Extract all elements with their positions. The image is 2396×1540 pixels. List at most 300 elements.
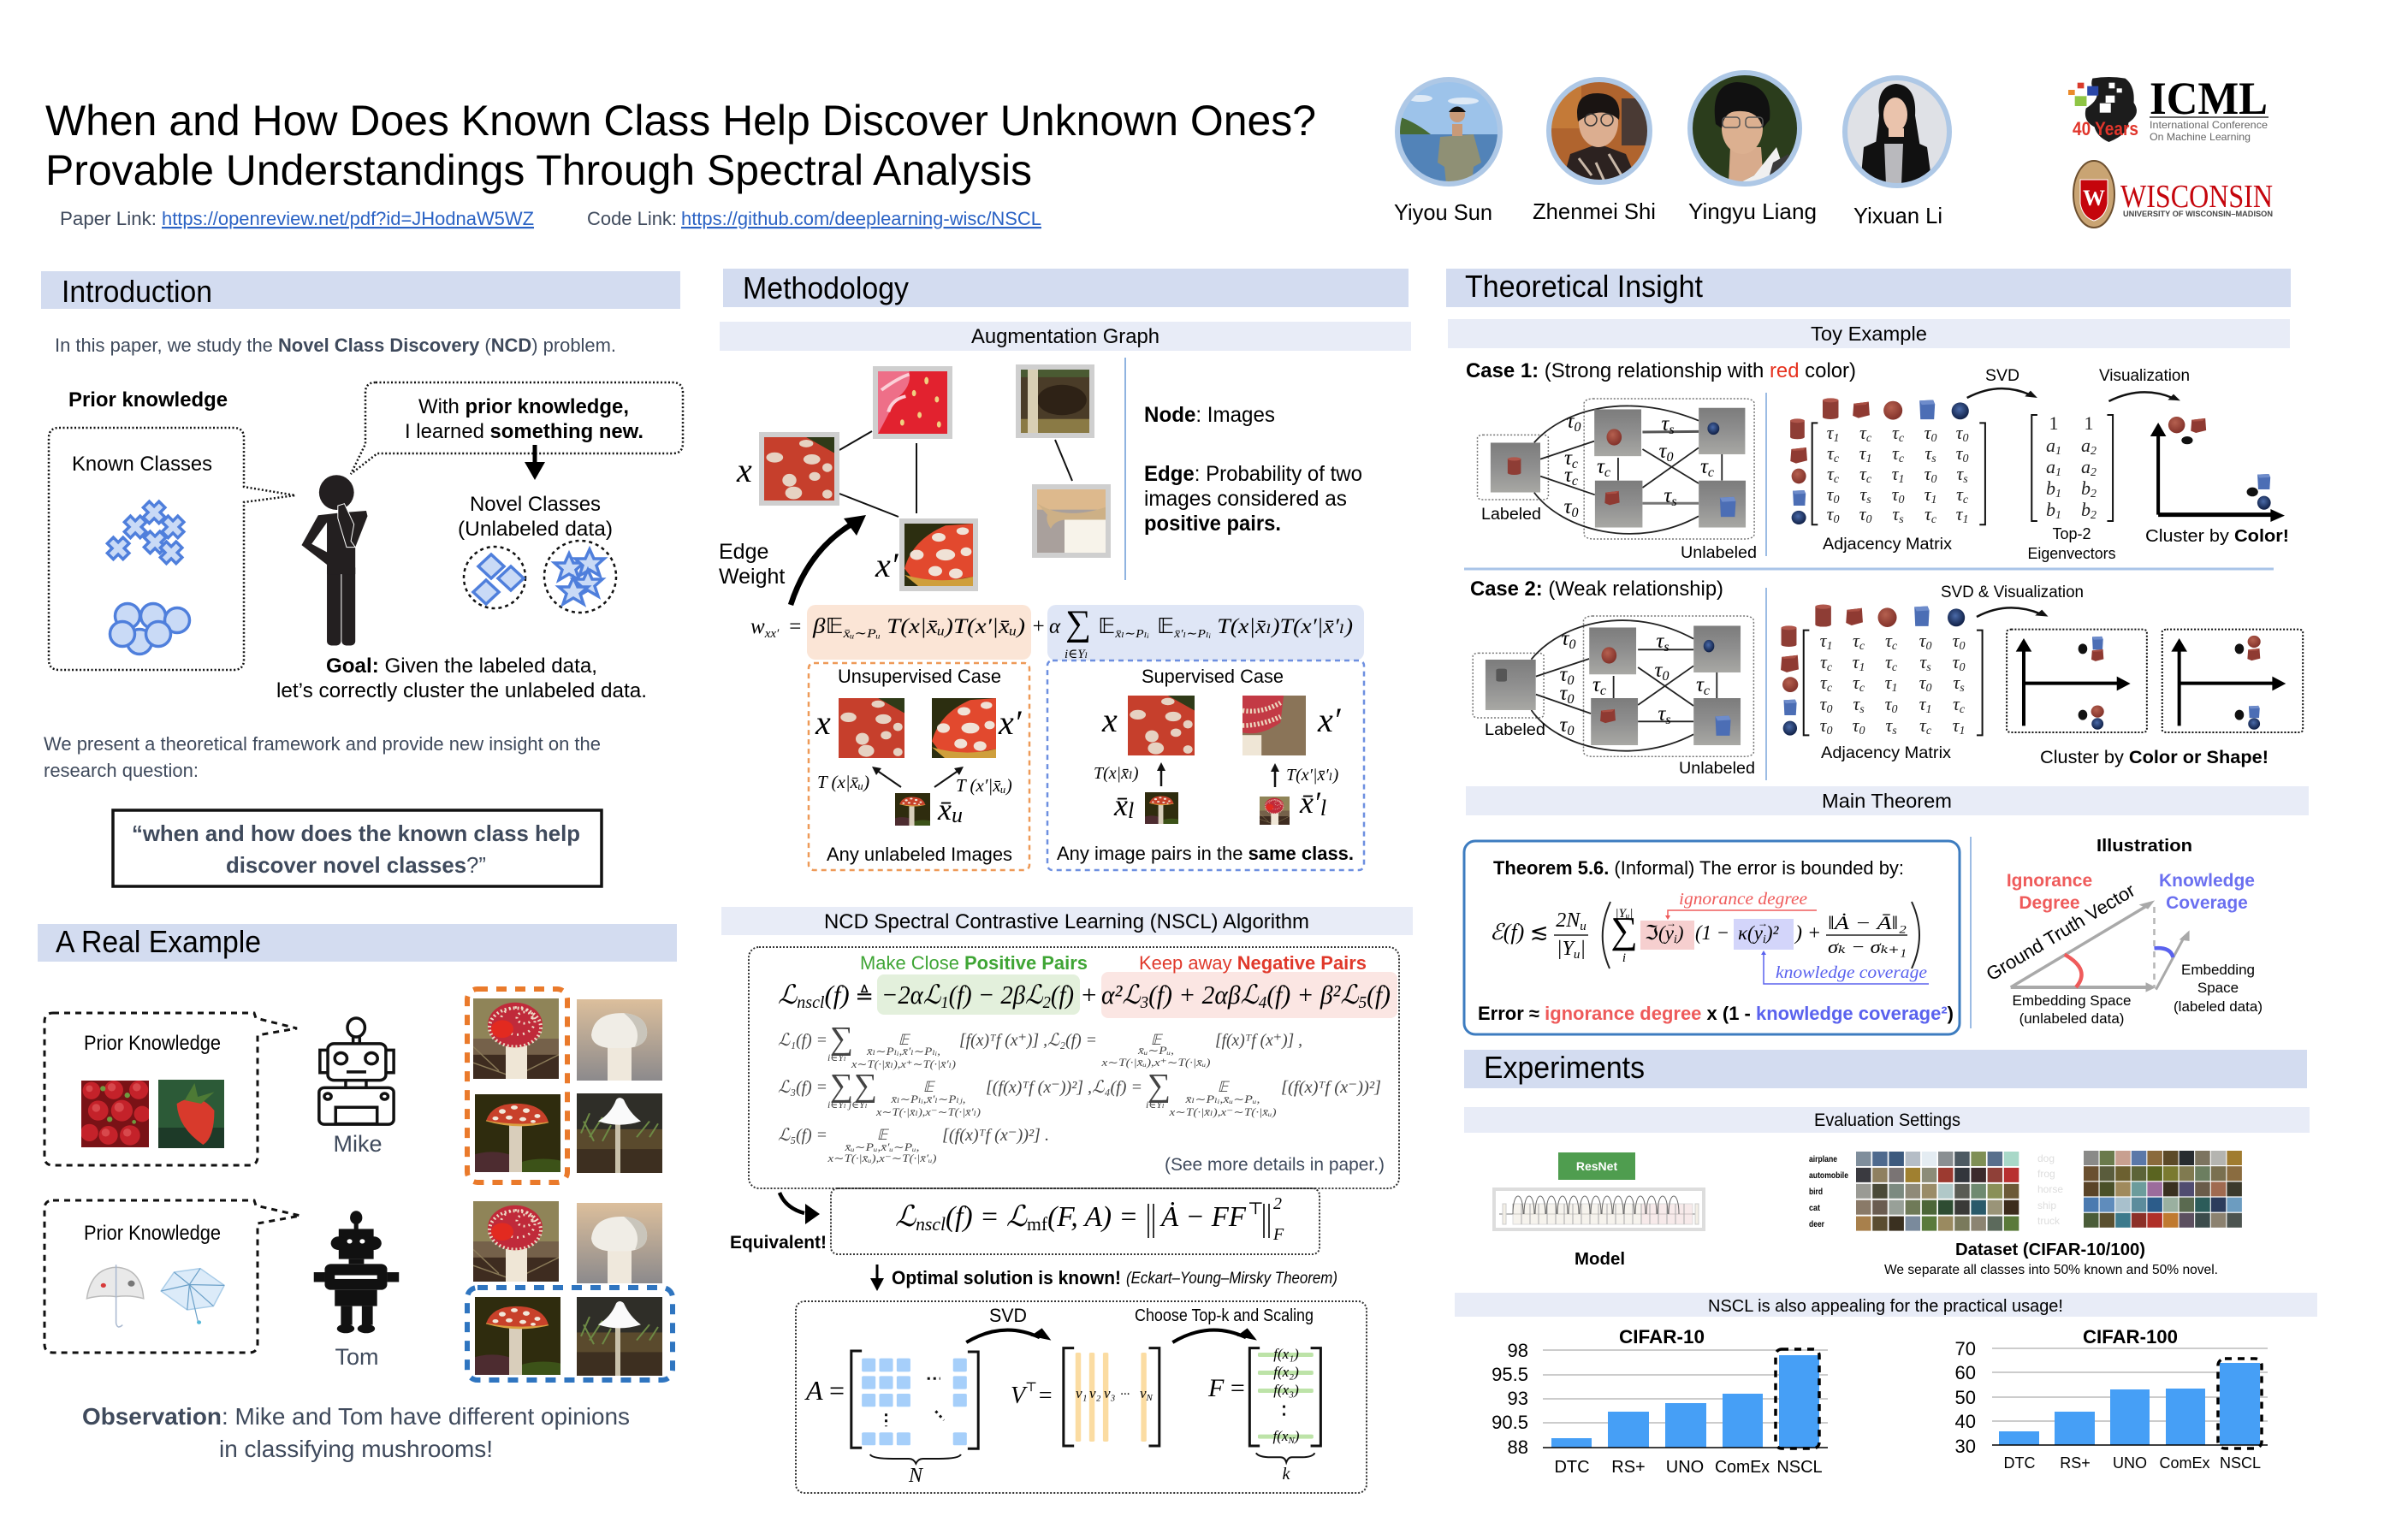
bar chart: CIFAR-10: NSCL	[1776, 1458, 1823, 1477]
matrix: case 1 adjacency: c	[1899, 432, 1905, 445]
equation: edge weight: 𝔼	[1149, 613, 1174, 638]
panel: unsupervised case: x̄	[938, 792, 952, 826]
matrix: case 2 adjacency: τ	[1885, 672, 1891, 693]
equation: error bound: i	[1674, 933, 1677, 946]
matrix: case 1 adjacency: 0	[1962, 432, 1968, 445]
equation: NSCL loss: +	[1080, 980, 1098, 1010]
matrix: case 1 adjacency: s	[1866, 494, 1871, 506]
matrix: case 2 adjacency: τ	[1820, 714, 1826, 736]
text: observation: in classifying mushrooms!	[219, 1436, 493, 1462]
callout: speech bubble	[351, 382, 683, 474]
matrix F: F =	[1207, 1374, 1245, 1402]
label: edge weight with arrow: Weight	[719, 565, 785, 589]
heading: Theoretical Insight: Theoretical Insight	[1465, 269, 1703, 304]
matrix: case 2 adjacency: 1	[1891, 682, 1897, 695]
matrix: case 1 adjacency: c	[1834, 473, 1840, 486]
author: Yiyou Sun: Yiyou Sun	[1394, 199, 1492, 225]
matrix: case 2 adjacency: c	[1960, 703, 1966, 716]
equation: error bound: i	[1622, 951, 1626, 965]
image grid: CIFAR novel classes: horse	[2037, 1183, 2063, 1195]
equations: L1 to L5: x̄ᵤ∼Pᵤ,	[1137, 1045, 1174, 1057]
matrix: case 1 adjacency: τ	[1827, 483, 1833, 505]
diagram: case 1 graph: c	[1708, 465, 1714, 480]
equation: matrix factorization: F	[1272, 1225, 1284, 1244]
arrow: equivalent: Equivalent!	[730, 1233, 827, 1253]
equation: error bound: |Y	[1557, 938, 1574, 960]
matrix F: f(x₃)	[1273, 1382, 1299, 1398]
matrix: case 1 adjacency: 1	[1898, 473, 1904, 486]
logo: ICML	[2068, 73, 2268, 143]
panel: unsupervised case: u	[952, 803, 963, 827]
matrix: case 2 adjacency: 1	[1925, 703, 1931, 716]
diagram: case 1 graph: c	[1572, 474, 1578, 489]
equation: error bound	[1490, 890, 1927, 982]
diagram: case 2 graph: 0	[1567, 673, 1574, 688]
diagram: case 2 graph: τ	[1562, 627, 1569, 650]
matrix: case 1 adjacency: 0	[1833, 494, 1839, 506]
image grid: CIFAR known classes	[1809, 1152, 2019, 1231]
panel: methodology	[719, 269, 1413, 1493]
equations: L1 to L5: ℒ₅(f) =	[778, 1126, 827, 1145]
diagram: ResNet model: Model	[1575, 1250, 1625, 1269]
callout: speech bubble: I learned something new.	[405, 420, 643, 443]
equation: error bound: ignorance degree	[1679, 890, 1807, 909]
bar chart: CIFAR-100: 40	[1955, 1411, 1976, 1432]
icon: thinking person	[301, 475, 367, 645]
diagram: case 1 graph: Labeled	[1481, 506, 1541, 524]
equation: error bound: ) +	[1794, 922, 1821, 945]
panel: SVD solution: Choose Top-k and Scaling	[1135, 1306, 1314, 1325]
matrix: case 1 adjacency: 0	[1962, 453, 1968, 465]
matrix: case 2 adjacency: τ	[1853, 693, 1859, 714]
diagram: case 1 graph	[1478, 399, 1757, 562]
diagram: case 2 graph: τ	[1656, 630, 1664, 653]
equations: L1 to L5: x∼T(·|x̄ₗ),x⁻∼T(·|x̄ᵤ)	[1168, 1106, 1277, 1118]
text: novel classes	[458, 493, 613, 541]
matrix: case 1 adjacency: τ	[1956, 483, 1963, 505]
callout: Tom prior knowledge	[44, 1200, 300, 1353]
matrix: top-2 eigenvectors: 2	[2091, 466, 2096, 479]
equation: NSCL loss: −2αℒ	[881, 980, 946, 1010]
matrix: case 2 adjacency: 0	[1826, 703, 1832, 716]
bar chart: CIFAR-10: ComEx	[1715, 1458, 1770, 1477]
equation: NSCL loss: ℒ	[778, 980, 797, 1010]
diagram: case 2 graph: τ	[1696, 673, 1704, 696]
matrix: case 1 adjacency: s	[1899, 513, 1904, 526]
icon: robot Tom	[314, 1211, 399, 1370]
equation: NSCL loss: (f) + 2αβℒ	[1148, 980, 1259, 1010]
label: prior knowledge: Prior knowledge	[68, 388, 228, 412]
image grid: CIFAR novel classes: frog	[2037, 1168, 2055, 1180]
matrix: case 1 adjacency: τ	[1827, 463, 1834, 484]
logo: ICML: On Machine Learning	[2150, 131, 2251, 143]
logo: ICML: International Conference	[2150, 119, 2268, 131]
diagram: illustration: Knowledge	[2159, 871, 2255, 891]
arrows: SVD and Visualization: Visualization	[2099, 367, 2190, 385]
equations: L1 to L5: x̄ₗ∼Pₗᵢ,x̄ᵤ∼Pᵤ,	[1184, 1093, 1260, 1105]
callout: research question: “when and how does the known class help	[132, 820, 580, 846]
matrix: case 2 adjacency: τ	[1919, 693, 1925, 714]
equation: NSCL loss: 5	[1359, 993, 1367, 1012]
heading: Introduction	[41, 271, 680, 309]
matrix: case 2 adjacency: τ	[1885, 630, 1892, 651]
matrix: case 2 adjacency: c	[1827, 682, 1833, 695]
matrix: case 2 adjacency: τ	[1919, 714, 1926, 736]
panel: SVD solution	[796, 1301, 1367, 1493]
equation: NSCL loss: (f) − 2βℒ	[949, 980, 1043, 1010]
matrix: case 1 adjacency: τ	[1859, 463, 1866, 484]
matrix: case 2 adjacency: 1	[1826, 640, 1832, 653]
equation: matrix factorization	[831, 1188, 1320, 1254]
matrix V transpose: ⊤	[1025, 1381, 1037, 1395]
bar chart: CIFAR-100: ComEx	[2160, 1454, 2209, 1472]
matrix: case 1 adjacency: c	[1963, 494, 1969, 506]
bar chart: CIFAR-10: 98	[1508, 1340, 1528, 1361]
subheading: Main Theorem: Main Theorem	[1822, 790, 1952, 812]
matrix: case 1 adjacency: c	[1866, 432, 1872, 445]
matrix: case 2 adjacency: c	[1859, 682, 1865, 695]
title: Provable Understandings Through Spectral Analysis	[45, 146, 1032, 194]
heading: Methodology: Methodology	[743, 270, 909, 305]
equation: edge weight: w	[750, 615, 765, 638]
author: Yingyu Liang: Yingyu Liang	[1688, 198, 1817, 224]
matrix: top-2 eigenvectors: 2	[2091, 445, 2096, 458]
matrix: top-2 eigenvectors: Top-2	[2052, 525, 2091, 542]
arrows: SVD and Visualization: SVD	[1985, 367, 2019, 385]
diagram: case 1 graph: 0	[1571, 506, 1578, 520]
panel: supervised case	[1047, 660, 1364, 870]
matrix: case 2 adjacency: 0	[1859, 725, 1865, 737]
matrix: case 1 adjacency: 0	[1865, 513, 1871, 526]
panel: supervised case: Any image pairs in the same class.	[1057, 843, 1354, 864]
matrix: case 2 adjacency: s	[1926, 661, 1931, 674]
matrix: case 2 adjacency: s	[1960, 682, 1965, 695]
panel: unsupervised case: Unsupervised Case	[838, 666, 1001, 687]
matrix: top-2 eigenvectors: 1	[2055, 509, 2061, 522]
diagram: case 2 graph: 0	[1662, 669, 1669, 684]
diagram: case 1 graph: τ	[1597, 455, 1604, 478]
divider line	[1124, 358, 1126, 580]
logo: ICML: ICML	[2150, 73, 2268, 124]
diagram: ResNet model	[1494, 1152, 1704, 1269]
callout: known classes: Known Classes	[72, 453, 212, 476]
matrix: case 2 adjacency: τ	[1885, 693, 1891, 714]
matrix: case 2 adjacency: 0	[1959, 640, 1965, 653]
matrix: top-2 eigenvectors: a	[2046, 456, 2055, 477]
paper and code links	[60, 208, 1041, 229]
diagram: illustration: Coverage	[2166, 893, 2248, 913]
matrix: top-2 eigenvectors: b	[2046, 477, 2055, 499]
equation: edge weight: x̄ᵤ∼Pᵤ	[843, 627, 881, 641]
equations: L1 to L5: [f(x)ᵀf (x⁺)] ,	[1215, 1031, 1302, 1050]
equation: error bound: )²	[1764, 922, 1779, 944]
matrix: case 2 adjacency: 1	[1859, 661, 1865, 674]
bar chart: CIFAR-10: CIFAR-10	[1619, 1326, 1705, 1348]
icon: unlabeled diamonds and stars	[464, 541, 616, 613]
equations: L1 to L5: i∈Yₗ j∈Yₗ	[827, 1099, 868, 1111]
panel: introduction	[41, 271, 683, 886]
equation: NSCL loss: 4	[1259, 993, 1266, 1012]
panel: supervised case: T(x|x̄ₗ)	[1094, 764, 1139, 783]
matrix: case 1 adjacency: τ	[1925, 422, 1930, 443]
panel: unsupervised case: T (x′|x̄ᵤ)	[956, 775, 1012, 796]
equation: edge weight: =	[789, 615, 801, 638]
matrix: case 2 adjacency: τ	[1953, 672, 1960, 693]
panel: supervised case: x′	[1317, 701, 1342, 739]
equation: NSCL loss: 2	[1043, 993, 1051, 1012]
charts: cluster by color or shape: Cluster by Color or Shape!	[2040, 748, 2268, 767]
equation: matrix factorization: ⊤	[1248, 1199, 1264, 1218]
diagram: illustration: Ground Truth Vector	[1983, 880, 2138, 985]
matrix F: f(x	[1273, 1428, 1288, 1444]
diagram: case 2 graph: τ	[1655, 659, 1662, 682]
panel: unsupervised case: T (x|x̄ᵤ)	[817, 772, 869, 792]
matrix: case 2 adjacency: s	[1859, 703, 1865, 716]
matrix: case 1 adjacency: c	[1866, 473, 1872, 486]
matrix F: f(x₁)	[1273, 1346, 1299, 1362]
diagram: case 2 graph: Unlabeled	[1679, 760, 1755, 778]
matrix: top-2 eigenvectors: a	[2081, 435, 2091, 456]
matrix F: k	[1283, 1465, 1291, 1484]
matrix: case 2 adjacency: τ	[1853, 672, 1859, 693]
equations: L1 to L5: 𝔼	[877, 1127, 890, 1143]
matrix: top-2 eigenvectors: 2	[2091, 509, 2096, 522]
diagram: case 2 graph: Labeled	[1485, 721, 1545, 739]
text: framework: We present a theoretical framework and provide new insight on the	[44, 733, 601, 755]
callout: known classes	[49, 428, 295, 670]
logo: Wisconsin: UNIVERSITY OF WISCONSIN–MADISON	[2123, 210, 2273, 218]
equation: NSCL loss: ≜	[850, 984, 874, 1009]
equation: error bound: ℑ(y	[1645, 922, 1674, 945]
callout: Tom prior knowledge: Prior Knowledge	[84, 1222, 221, 1245]
matrix V transpose: v	[1140, 1385, 1147, 1401]
matrix V transpose: =	[1037, 1383, 1053, 1409]
equations: L1 to L5: i∈Yₗ	[827, 1051, 846, 1063]
diagram: illustration	[1983, 837, 2263, 1027]
author: Yixuan Li: Yixuan Li	[1853, 203, 1942, 228]
equation: edge weight: i∈Yₗ	[1065, 648, 1088, 661]
image grid: CIFAR known classes: automobile	[1809, 1171, 1848, 1181]
paper and code links: Code Link:	[587, 208, 677, 229]
diagram: ResNet model: ResNet	[1576, 1159, 1617, 1173]
matrix: top-2 eigenvectors: 2	[2091, 488, 2096, 500]
panel: supervised case: x	[1101, 701, 1118, 739]
equation: matrix factorization: (F, A) =	[1047, 1201, 1138, 1233]
equations: L1 to L5: [(f(x)ᵀf (x⁻))²]	[1281, 1078, 1381, 1097]
diagram: case 1 graph: τ	[1661, 412, 1669, 435]
equation: error bound: →	[1758, 917, 1768, 929]
text: node and edge definition: Node: Images	[1144, 403, 1275, 427]
diagram: case 1 graph: s	[1669, 423, 1675, 437]
equations: L1 to L5: ℒ₃(f) =	[778, 1078, 827, 1097]
diagram: case 2 graph: τ	[1560, 714, 1567, 737]
equations: L1 to L5: 𝔼	[923, 1079, 936, 1095]
panel: unsupervised case: Any unlabeled Images	[827, 844, 1012, 865]
matrix: case 1 adjacency: 1	[1962, 513, 1968, 526]
diagram: case 2 graph: τ	[1592, 673, 1600, 696]
matrix: case 1 adjacency: c	[1834, 453, 1840, 465]
diagram: case 1 graph: τ	[1564, 447, 1572, 470]
panel: supervised case: x̄	[1114, 788, 1128, 822]
text: optimal solution with arrow	[870, 1265, 1337, 1291]
heading: Experiments: Experiments	[1484, 1050, 1645, 1085]
matrix: case 2 adjacency: τ	[1919, 651, 1926, 672]
panel: unsupervised case: x	[815, 703, 831, 742]
bar chart: CIFAR-100: DTC	[2004, 1454, 2035, 1472]
image grid: CIFAR novel classes: truck	[2037, 1215, 2061, 1227]
diagram: case 1 graph: s	[1671, 495, 1677, 509]
images: mushrooms for Mike	[462, 989, 662, 1182]
equation: NSCL loss: 1	[940, 993, 949, 1012]
matrix: case 2 adjacency: 0	[1826, 725, 1832, 737]
diagram: illustration: Embedding	[2181, 962, 2255, 978]
matrix: case 2 adjacency: τ	[1853, 651, 1859, 672]
equation: NSCL loss: 3	[1140, 993, 1148, 1012]
matrix: case 1 adjacency: τ	[1827, 442, 1834, 464]
callout: Mike prior knowledge: Prior Knowledge	[84, 1032, 221, 1055]
diagram: case 2 graph	[1473, 616, 1755, 778]
text: dataset caption	[1884, 1241, 2218, 1277]
diagram: case 2 graph: 0	[1567, 724, 1574, 738]
text: goal: Goal: Given the labeled data,	[326, 654, 597, 678]
matrix: top-2 eigenvectors: b	[2046, 499, 2055, 520]
equations: L1 to L5: 𝔼	[1218, 1079, 1231, 1095]
bar chart: CIFAR-10	[1492, 1326, 1828, 1477]
matrix F: f(x₂)	[1273, 1364, 1299, 1380]
subheading: Toy Example: Toy Example	[1811, 323, 1927, 345]
diagram: augmentation graph	[736, 367, 1108, 589]
matrix: case 2 adjacency: 0	[1925, 682, 1931, 695]
bar chart: CIFAR-100: RS+	[2060, 1454, 2091, 1472]
equation: error bound: σₖ − σₖ₊₁	[1828, 936, 1907, 957]
charts: cluster by color or shape	[2007, 630, 2303, 767]
icon: robot Mike	[319, 1018, 394, 1157]
equation: error bound: |	[1580, 938, 1586, 960]
arrow: SVD and visualization: SVD & Visualization	[1941, 583, 2084, 601]
matrix: case 1 adjacency: τ	[1925, 503, 1931, 524]
panel: NSCL loss: Keep away Negative Pairs	[1139, 952, 1367, 974]
text: optimal solution with arrow: (Eckart–Young–Mirsky Theorem)	[1126, 1270, 1337, 1288]
diagram: case 1 graph: c	[1604, 465, 1610, 480]
diagram: case 1 graph: c	[1572, 457, 1578, 471]
panel: NSCL loss: Make Close Positive Pairs	[860, 952, 1088, 974]
matrix: case 1 adjacency: τ	[1956, 422, 1962, 443]
matrix: case 2 adjacency: 1	[1959, 725, 1965, 737]
bar chart: CIFAR-100: 30	[1955, 1436, 1976, 1457]
matrix: case 2 adjacency: τ	[1820, 693, 1826, 714]
matrix V transpose: ···	[1120, 1388, 1130, 1401]
image grid: CIFAR novel classes: dog	[2037, 1152, 2055, 1164]
panel: unsupervised case	[809, 663, 1029, 870]
heading: Experiments	[1464, 1050, 2307, 1088]
matrix: top-2 eigenvectors: a	[2046, 435, 2055, 456]
equation: edge weight: α	[1049, 615, 1061, 638]
equations: L1 to L5: ℒ₁(f) =	[778, 1031, 827, 1050]
diagram: case 1 graph: τ	[1567, 410, 1574, 433]
heading: Methodology	[723, 269, 1409, 307]
subheading: Augmentation Graph	[720, 322, 1411, 351]
equation: edge weight: T(x|x̄ₗ)T(x′|x̄′ₗ)	[1211, 615, 1353, 638]
divider line	[1970, 837, 1972, 1028]
equation: edge weight: T(x|x̄ᵤ)T(x′|x̄ᵤ)	[881, 615, 1025, 638]
equation: NSCL loss: nscl	[797, 993, 825, 1012]
author: Zhenmei Shi	[1533, 77, 1656, 224]
text: error summary: Error ≈ ignorance degree x (1 - knowledge coverage²)	[1478, 1003, 1954, 1024]
matrix: case 1 adjacency: s	[1931, 453, 1936, 465]
bar chart: CIFAR-10: 95.5	[1492, 1364, 1528, 1385]
equation: edge weight: x̄ₗ∼Pₗᵢ	[1114, 628, 1149, 641]
equations: L1 to L5: ∑	[1148, 1068, 1171, 1104]
equation: error bound: |Yᵤ|	[1616, 907, 1633, 921]
bar chart: CIFAR-10: UNO	[1666, 1458, 1704, 1477]
matrix: case 2 adjacency: τ	[1953, 714, 1959, 736]
diagram: illustration: (labeled data)	[2174, 998, 2263, 1015]
matrix: case 2 adjacency: 0	[1925, 640, 1931, 653]
matrix: case 1 adjacency: τ	[1827, 503, 1833, 524]
equations: L1 to L5: ∑	[830, 1068, 853, 1104]
image grid: CIFAR known classes: airplane	[1809, 1155, 1837, 1164]
diagram: case 1 graph: τ	[1700, 455, 1708, 478]
equation: matrix factorization: 2	[1273, 1194, 1282, 1213]
equation: matrix factorization: ℒ	[895, 1201, 916, 1233]
subheading: practical usage	[1455, 1293, 2317, 1317]
subheading: Main Theorem	[1466, 786, 2309, 815]
text: observation	[82, 1403, 630, 1462]
text: observation: Observation: Mike and Tom have different opinions	[82, 1403, 630, 1430]
equation: error bound: →	[1666, 917, 1676, 929]
equation: error bound: u	[1574, 948, 1580, 962]
equations: L1 to L5: x∼T(·|x̄ₗ),x⁻∼T(·|x̄′ₗ)	[875, 1106, 981, 1118]
image grid: CIFAR known classes: bird	[1809, 1188, 1823, 1197]
equation: NSCL loss: α²ℒ	[1101, 980, 1142, 1010]
matrix: case 1 adjacency: c	[1931, 513, 1937, 526]
equations: L1 to L5	[778, 1021, 1381, 1164]
equation: edge weight: +	[1031, 615, 1046, 638]
subheading: practical usage: NSCL is also appealing for the practical usage!	[1708, 1297, 2063, 1316]
matrix: case 1 adjacency: τ	[1892, 483, 1898, 505]
equation: matrix factorization: mf	[1027, 1213, 1048, 1235]
subheading: NSCL Algorithm	[721, 907, 1413, 935]
text: goal	[276, 654, 647, 702]
diagram: case 1 graph: τ	[1664, 484, 1671, 507]
arrows: SVD and Visualization	[1967, 367, 2190, 401]
equations: L1 to L5: x∼T(·|x̄ᵤ),x⁻∼T(·|x̄′ᵤ)	[827, 1152, 936, 1164]
text: novel classes: (Unlabeled data)	[458, 518, 613, 541]
matrix: case 2 adjacency: 0	[1959, 661, 1965, 674]
matrix: case 2 adjacency: s	[1892, 725, 1897, 737]
panel: supervised case: l	[1320, 796, 1326, 820]
equation: NSCL loss	[778, 980, 1391, 1012]
diagram: case 1 graph: 0	[1666, 450, 1673, 465]
text: goal: let’s correctly cluster the unlabeled data.	[276, 679, 647, 702]
diagram: augmentation graph: x′	[875, 546, 899, 584]
matrix: top-2 eigenvectors: b	[2081, 477, 2091, 499]
note: more details: (See more details in paper.)	[1165, 1155, 1385, 1175]
bar chart: CIFAR-100: 60	[1955, 1362, 1976, 1383]
diagram: case 2 graph: τ	[1560, 663, 1567, 686]
logo: Wisconsin: WISCONSIN	[2120, 179, 2273, 215]
matrix: case 1 adjacency: τ	[1956, 442, 1962, 464]
bar chart: CIFAR-10: 93	[1508, 1388, 1528, 1409]
diagram: case 2 graph: c	[1704, 684, 1710, 698]
matrix: case 1 adjacency: τ	[1956, 463, 1963, 484]
matrix: case 2 adjacency: τ	[1885, 714, 1892, 736]
matrix: case 1 adjacency: τ	[1859, 503, 1865, 524]
matrix: case 1 adjacency: τ	[1859, 442, 1865, 464]
diagram: case 2 graph: c	[1600, 684, 1606, 698]
subheading: Evaluation Settings	[1464, 1107, 2310, 1133]
heading: A Real Example	[38, 924, 677, 962]
